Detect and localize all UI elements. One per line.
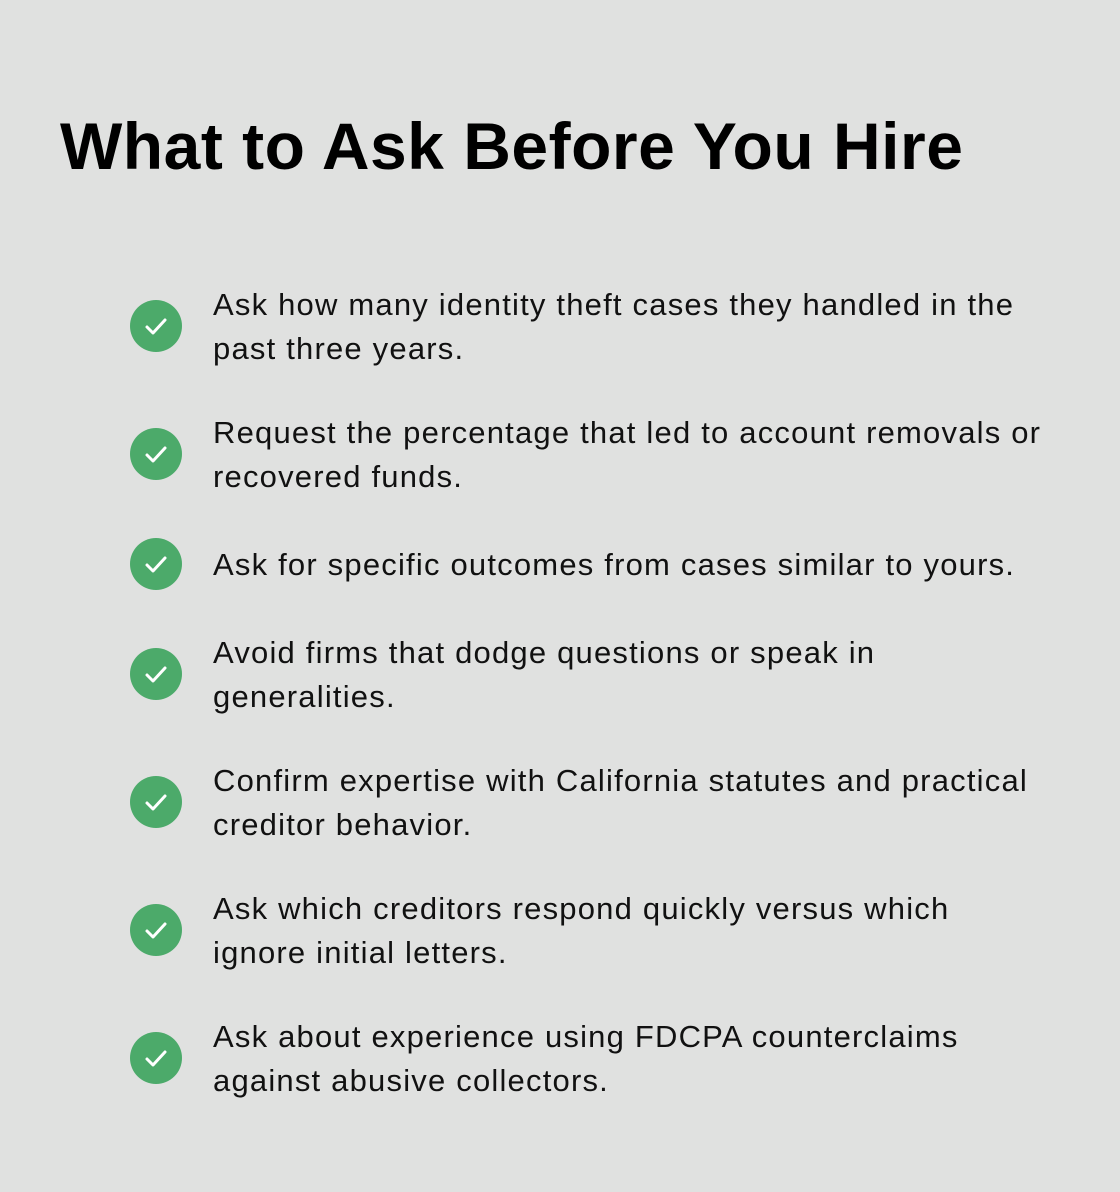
- text: ignore initial letters.: [213, 935, 508, 970]
- text: Avoid firms that dodge questions or speak in: [213, 635, 875, 670]
- item 5: [130, 763, 1028, 842]
- text: [213, 415, 1041, 494]
- icon: check: [130, 1032, 182, 1084]
- item 3: [130, 538, 1015, 590]
- item 1: [130, 287, 1014, 366]
- text: creditor behavior.: [213, 807, 472, 842]
- text: Request the percentage that led to account removals or: [213, 415, 1041, 450]
- text: Ask which creditors respond quickly versus which: [213, 891, 949, 926]
- item 4: [130, 635, 875, 714]
- item 2: [130, 415, 1041, 494]
- text: generalities.: [213, 679, 396, 714]
- icon: check: [130, 300, 182, 352]
- icon: check: [130, 538, 182, 590]
- item 6: [130, 891, 949, 970]
- text: [213, 635, 875, 714]
- item 7: [130, 1019, 959, 1098]
- text: [213, 1019, 959, 1098]
- text: past three years.: [213, 331, 464, 366]
- text: Ask about experience using FDCPA counterclaims: [213, 1019, 959, 1054]
- text: [213, 763, 1028, 842]
- title: What to Ask Before You Hire: [60, 109, 963, 183]
- text: Ask how many identity theft cases they handled in the: [213, 287, 1014, 322]
- icon: check: [130, 776, 182, 828]
- icon: check: [130, 904, 182, 956]
- text: [213, 287, 1014, 366]
- icon: check: [130, 648, 182, 700]
- text: against abusive collectors.: [213, 1063, 609, 1098]
- text: Confirm expertise with California statutes and practical: [213, 763, 1028, 798]
- text: [213, 891, 949, 970]
- text: recovered funds.: [213, 459, 463, 494]
- icon: check: [130, 428, 182, 480]
- text: Ask for specific outcomes from cases similar to yours.: [213, 547, 1015, 582]
